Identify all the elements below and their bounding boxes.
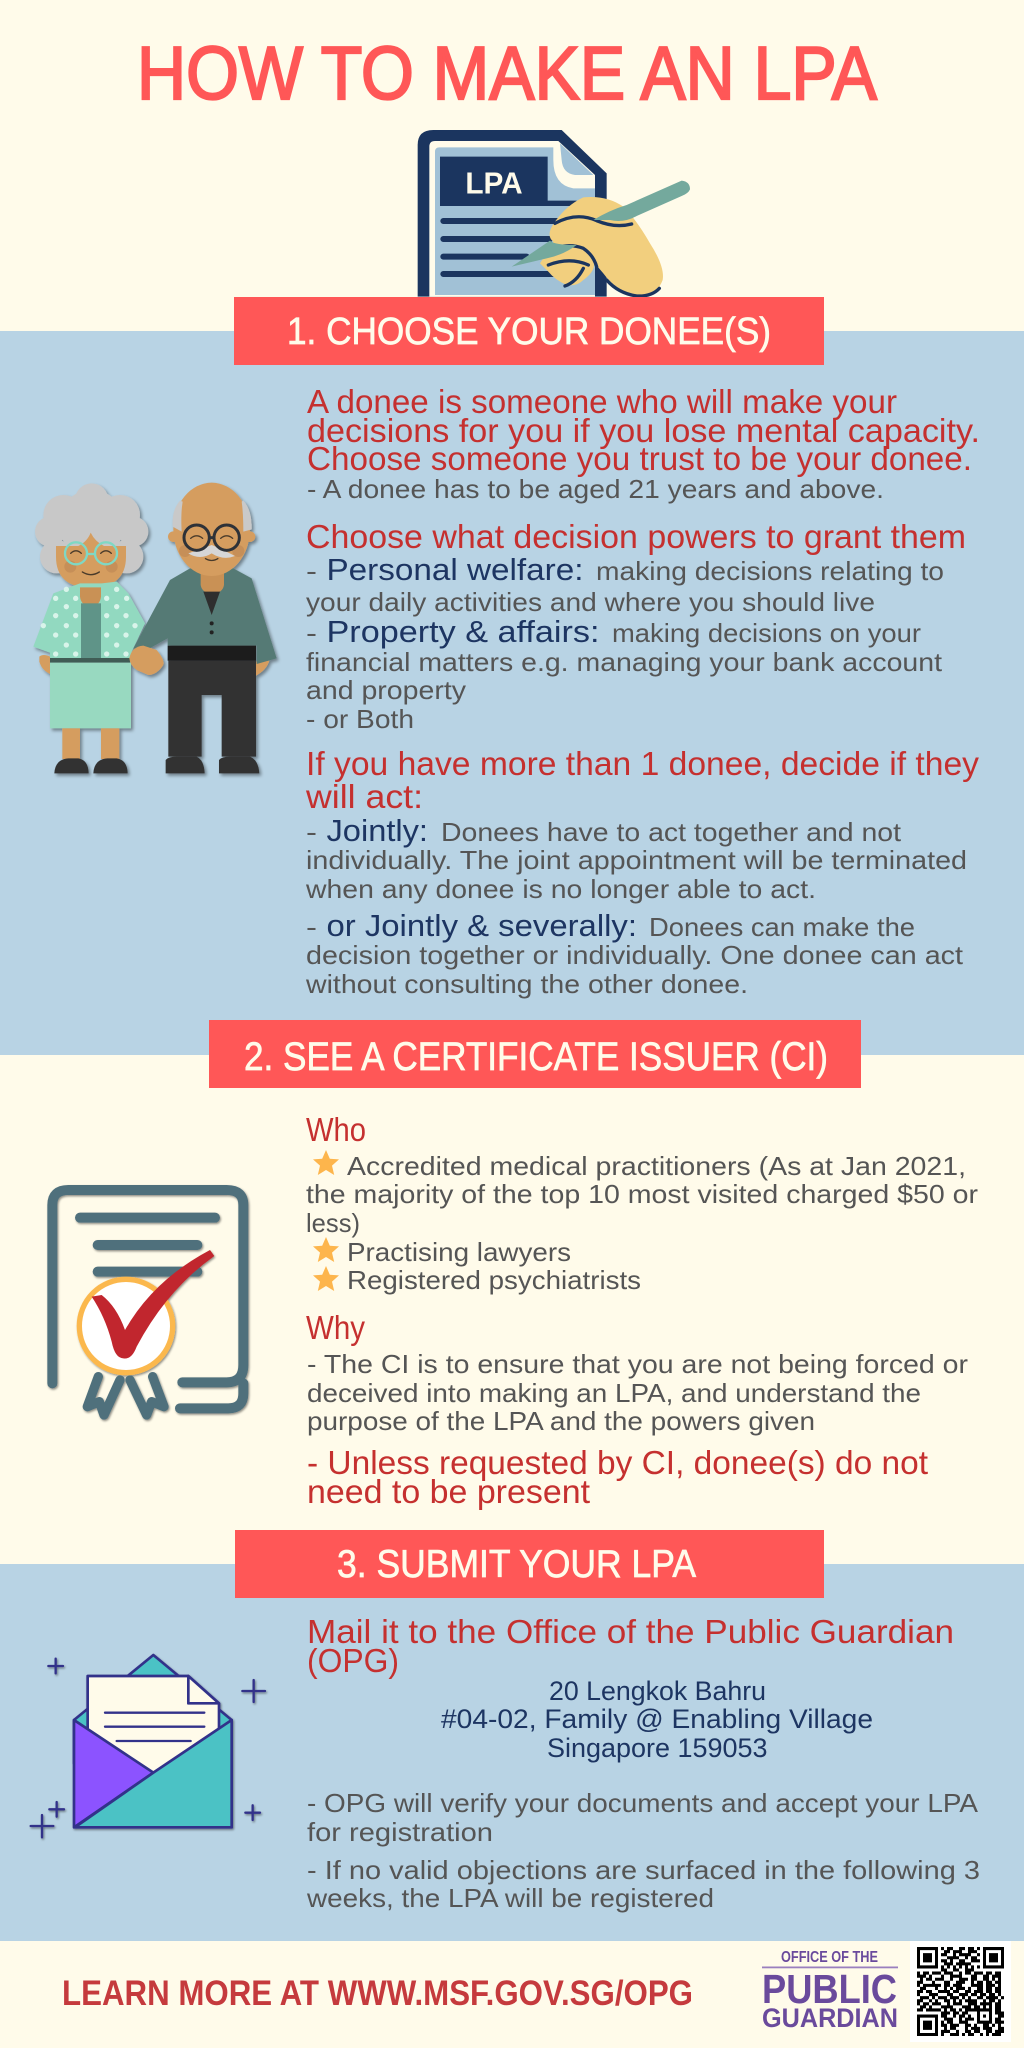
joined hands xyxy=(129,646,164,675)
text: registration notes: for registration xyxy=(307,1817,493,1847)
text: what a donee is: - A donee has to be aged 21 years and above. xyxy=(307,474,884,504)
text: more than one donee: individually. The joint appointment will be terminated xyxy=(306,845,967,875)
LPA label: LPA xyxy=(465,166,523,200)
text: OPG address xyxy=(441,1676,873,1763)
QR code xyxy=(910,1941,1011,2042)
text: who: Registered psychiatrists xyxy=(347,1265,641,1295)
man xyxy=(133,483,277,773)
icon: open envelope with letter xyxy=(31,1655,265,1837)
text: OPG address: 20 Lengkok Bahru xyxy=(549,1676,766,1706)
text: more than one donee: decision together or individually. One donee can act xyxy=(306,940,964,970)
icon: star xyxy=(313,1150,339,1175)
text: more than one donee: If you have more than 1 donee, decide if they xyxy=(306,745,980,782)
text: registration notes: - OPG will verify your documents and accept your LPA xyxy=(307,1788,979,1818)
text: registration notes: weeks, the LPA will be registered xyxy=(306,1883,714,1913)
banner: step 1 xyxy=(234,297,824,365)
text: why: deceived into making an LPA, and understand the xyxy=(307,1378,921,1408)
logo: Office of the Public Guardian: OFFICE OF THE xyxy=(781,1949,878,1966)
text: decision powers: - or Both xyxy=(306,704,414,734)
banner: step 3: 3. SUBMIT YOUR LPA xyxy=(337,1543,696,1586)
text: more than one donee: or Jointly & severally: xyxy=(326,908,637,943)
text: what a donee is xyxy=(307,383,980,504)
woman xyxy=(33,483,148,773)
text: registration notes: - If no valid objections are surfaced in the following 3 xyxy=(307,1855,980,1885)
text: decision powers: Personal welfare: xyxy=(326,552,584,587)
text: decision powers: financial matters e.g. managing your bank account xyxy=(306,647,943,677)
icon: certificate with check mark xyxy=(52,1190,243,1415)
text: who xyxy=(306,1111,978,1295)
text: more than one donee xyxy=(305,745,980,999)
text: decision powers: making decisions relating to xyxy=(596,556,944,586)
banner: step 2 xyxy=(209,1020,861,1088)
icon: LPA document with writing hand xyxy=(418,130,690,297)
text: more than one donee: when any donee is no longer able to act. xyxy=(305,874,816,904)
text: decision powers xyxy=(306,518,966,734)
text: more than one donee: Donees can make the xyxy=(649,912,915,942)
text: what a donee is: A donee is someone who will make your xyxy=(307,383,897,420)
text: mail to OPG: Mail it to the Office of the Public Guardian xyxy=(307,1613,954,1650)
text: more than one donee: Jointly: xyxy=(326,813,428,848)
text: why: purpose of the LPA and the powers given xyxy=(307,1406,815,1436)
text: decision powers: - xyxy=(306,556,317,586)
logo: Office of the Public Guardian xyxy=(762,1949,898,2033)
text: who: Practising lawyers xyxy=(347,1237,571,1267)
text: more than one donee: - xyxy=(306,817,317,847)
text: mail to OPG: (OPG) xyxy=(307,1642,399,1679)
text: why: - The CI is to ensure that you are not being forced or xyxy=(307,1349,968,1379)
text: decision powers: and property xyxy=(306,675,466,705)
text: what a donee is: Choose someone you trust to be your donee. xyxy=(307,440,972,477)
text: more than one donee: without consulting the other donee. xyxy=(305,969,748,999)
text: decision powers: Choose what decision powers to grant them xyxy=(306,518,966,555)
text: decision powers: Property & affairs: xyxy=(326,614,600,649)
logo: Office of the Public Guardian: GUARDIAN xyxy=(762,2003,898,2033)
text: more than one donee: will act: xyxy=(305,778,423,815)
icon: star xyxy=(313,1237,339,1262)
logo: Office of the Public Guardian: PUBLIC xyxy=(762,1966,897,2012)
banner: step 1: 1. CHOOSE YOUR DONEE(S) xyxy=(287,311,771,353)
text: who: Who xyxy=(306,1111,366,1148)
text: decision powers: making decisions on your xyxy=(612,618,921,648)
text: why xyxy=(306,1309,968,1510)
text: more than one donee: - xyxy=(306,912,317,942)
icon: star xyxy=(313,1266,339,1291)
text: why: - Unless requested by CI, donee(s) do not xyxy=(307,1444,928,1481)
text: why: Why xyxy=(306,1309,365,1346)
banner: step 2: 2. SEE A CERTIFICATE ISSUER (CI) xyxy=(244,1035,828,1079)
text: who: the majority of the top 10 most visited charged $50 or xyxy=(306,1179,978,1209)
text: why: need to be present xyxy=(307,1473,590,1510)
text: decision powers: your daily activities and where you should live xyxy=(306,587,875,617)
text: mail to OPG xyxy=(307,1613,954,1679)
text: OPG address: #04-02, Family @ Enabling Village xyxy=(441,1704,873,1734)
text: registration notes xyxy=(306,1788,980,1913)
icon: elderly couple holding hands xyxy=(33,483,277,773)
banner: step 3 xyxy=(235,1530,824,1598)
text: who: less) xyxy=(306,1208,360,1238)
text: more than one donee: Donees have to act together and not xyxy=(441,817,902,847)
text: OPG address: Singapore 159053 xyxy=(547,1733,768,1763)
text: decision powers: - xyxy=(306,618,317,648)
title: HOW TO MAKE AN LPA xyxy=(137,31,877,115)
text: who: Accredited medical practitioners (As at Jan 2021, xyxy=(347,1151,966,1181)
text: what a donee is: decisions for you if you lose mental capacity. xyxy=(307,412,980,449)
footer: learn more link: LEARN MORE AT WWW.MSF.GOV.SG/OPG xyxy=(62,1974,693,2013)
